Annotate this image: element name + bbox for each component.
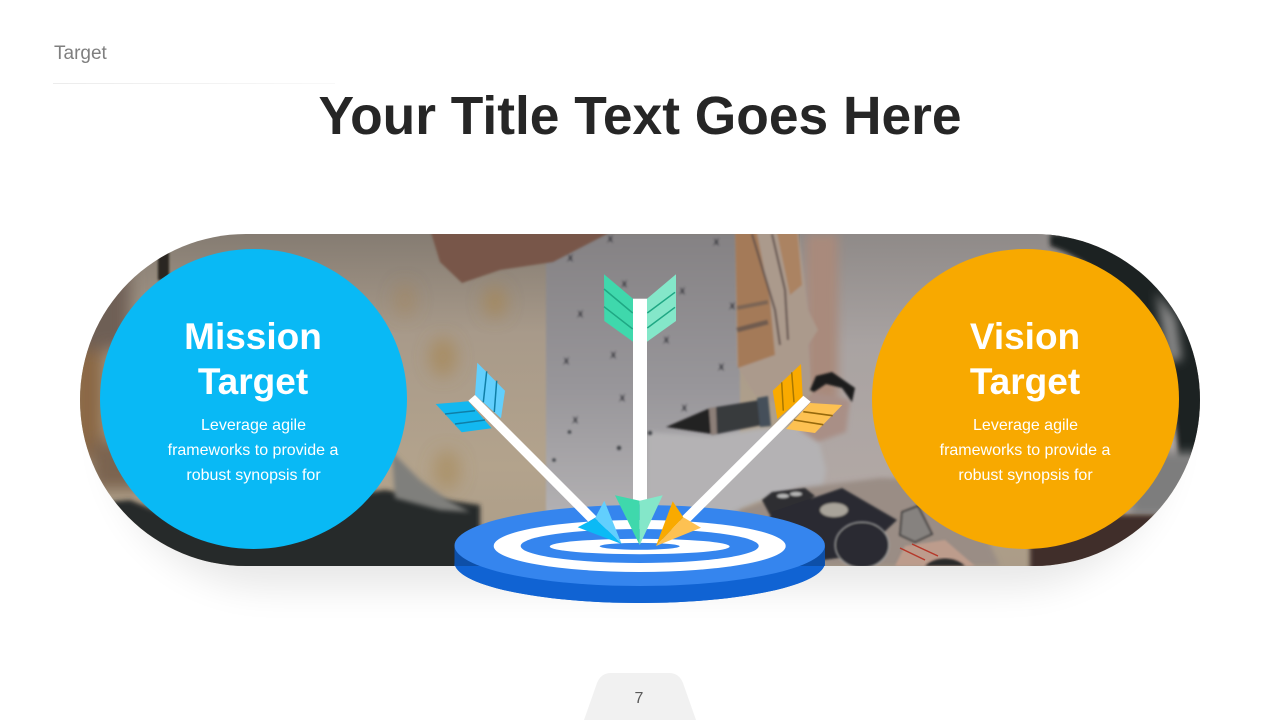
arrow: green bbox=[604, 274, 676, 545]
vision heading: Vision bbox=[970, 316, 1080, 357]
blurred wall tones bbox=[70, 270, 507, 490]
panel: photo background bbox=[70, 226, 1210, 580]
panel: vision target bbox=[872, 249, 1179, 549]
vision circle bbox=[872, 249, 1179, 549]
right wall bbox=[800, 234, 1200, 514]
footer page tab bbox=[584, 673, 696, 720]
white trousers bbox=[647, 425, 826, 512]
section label: Target bbox=[54, 43, 108, 64]
shirt figures bbox=[552, 234, 735, 462]
title: Your Title Text Goes Here bbox=[318, 87, 962, 146]
mission body: frameworks to provide a bbox=[168, 442, 338, 459]
vision body: frameworks to provide a bbox=[940, 442, 1110, 459]
mission heading: Mission bbox=[184, 316, 322, 357]
vision body: robust synopsis for bbox=[958, 467, 1093, 484]
arm bbox=[430, 234, 608, 284]
arrow: blue bbox=[436, 363, 622, 544]
belt bbox=[666, 396, 771, 435]
hand bbox=[800, 392, 850, 442]
table surface bbox=[735, 478, 1000, 566]
mission circle bbox=[100, 249, 407, 549]
glasses bbox=[835, 506, 932, 568]
vision body: Leverage agile bbox=[973, 417, 1078, 434]
dark lower left bbox=[112, 486, 484, 566]
mission heading: Target bbox=[198, 361, 308, 402]
scarf bbox=[735, 228, 818, 405]
shirt bbox=[546, 234, 740, 512]
dark post bbox=[158, 240, 169, 280]
panel: mission target bbox=[100, 249, 407, 549]
mission body: robust synopsis for bbox=[186, 467, 321, 484]
vision heading: Target bbox=[970, 361, 1080, 402]
mission body: Leverage agile bbox=[201, 417, 306, 434]
arrow: orange bbox=[656, 364, 842, 546]
dark upper right bbox=[1050, 234, 1210, 458]
page number: 7 bbox=[635, 690, 644, 707]
lower right surface bbox=[895, 540, 975, 566]
wallet bbox=[760, 488, 897, 566]
pill shadow bbox=[110, 270, 1170, 588]
target board bbox=[454, 505, 825, 603]
header rule bbox=[53, 83, 335, 84]
wristband bbox=[810, 372, 855, 402]
